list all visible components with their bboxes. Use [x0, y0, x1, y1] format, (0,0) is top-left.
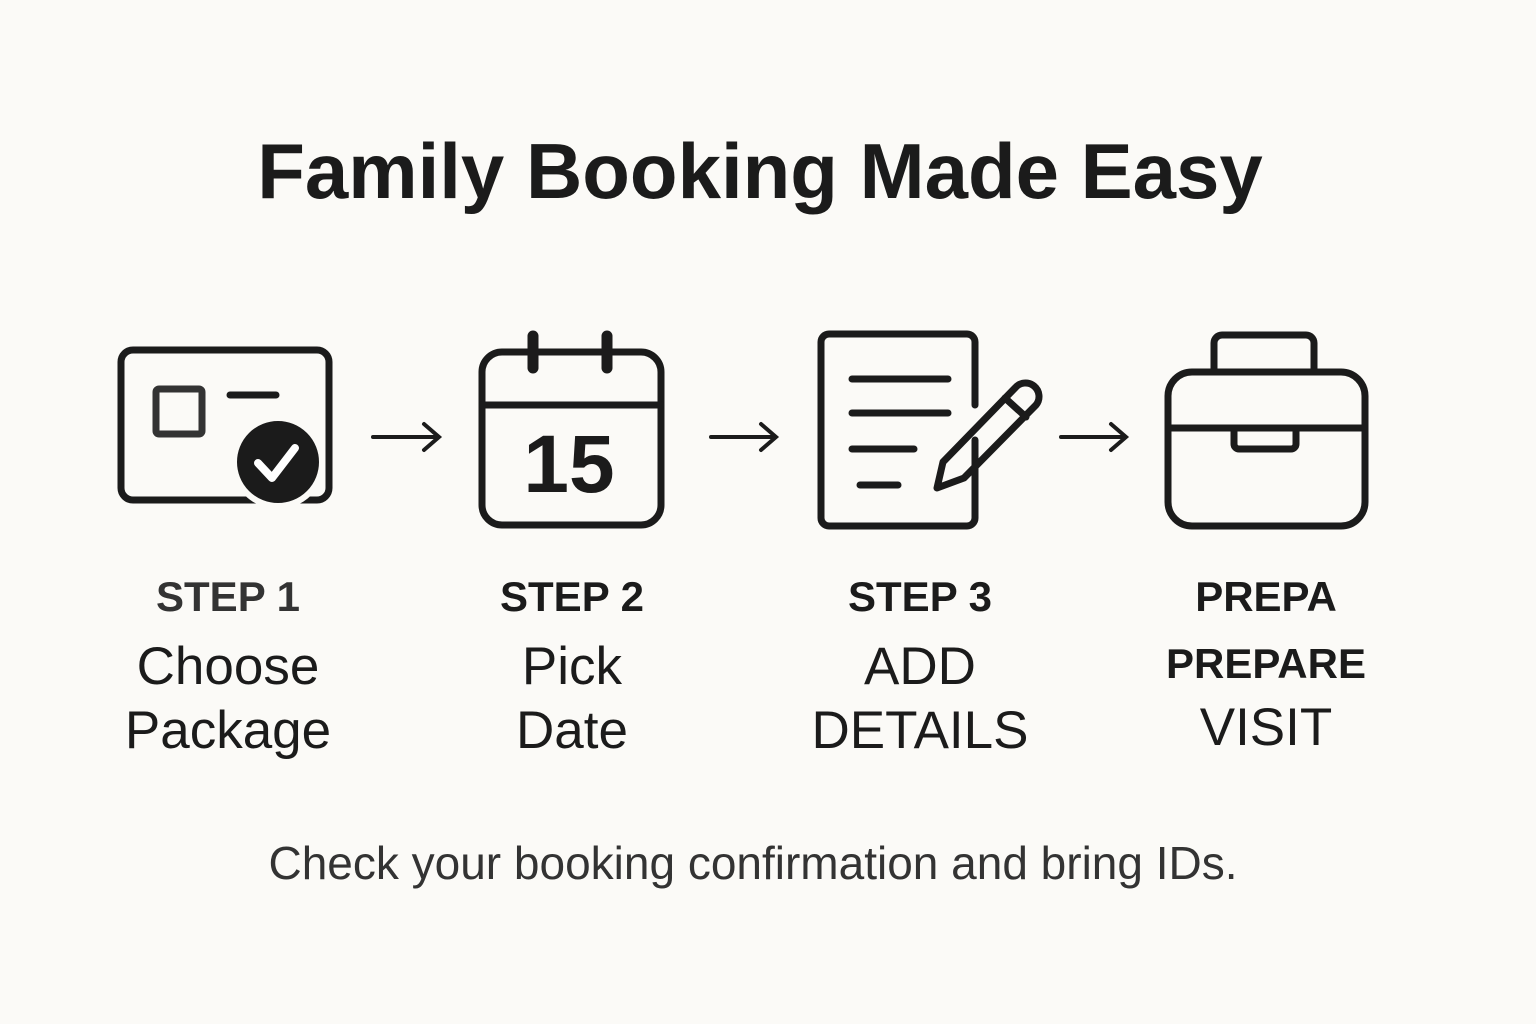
arrow 1: [373, 424, 439, 450]
step 2 text: Pick: [522, 637, 622, 696]
arrow 3: [1061, 424, 1126, 450]
footer note: Check your booking confirmation and bring IDs.: [268, 837, 1238, 889]
arrow 2: [711, 424, 776, 450]
step 2 text: STEP 2: [500, 573, 644, 620]
step 1 text: STEP 1: [156, 573, 300, 620]
icon: package card: [121, 350, 329, 506]
title: Family Booking Made Easy: [257, 127, 1263, 215]
step 3 text: STEP 3: [848, 573, 992, 620]
step 1 text: [125, 573, 331, 760]
icon: document with pencil: [821, 334, 1039, 526]
step 4 text: [1166, 573, 1366, 757]
step 2 text: [500, 573, 644, 760]
step 3 text: DETAILS: [812, 701, 1028, 760]
step 4 text: PREPARE: [1166, 640, 1366, 687]
step 3 text: [812, 573, 1028, 760]
step 2 text: Date: [516, 701, 628, 760]
step 3 text: ADD: [864, 637, 976, 696]
icon: calendar: 15: [523, 419, 615, 510]
step 4 text: PREPA: [1195, 573, 1337, 620]
icon: calendar: [482, 336, 661, 525]
icon: briefcase: [1168, 335, 1365, 526]
step 1 text: Package: [125, 701, 331, 760]
step 1 text: Choose: [137, 637, 319, 696]
step 4 text: VISIT: [1200, 698, 1332, 757]
